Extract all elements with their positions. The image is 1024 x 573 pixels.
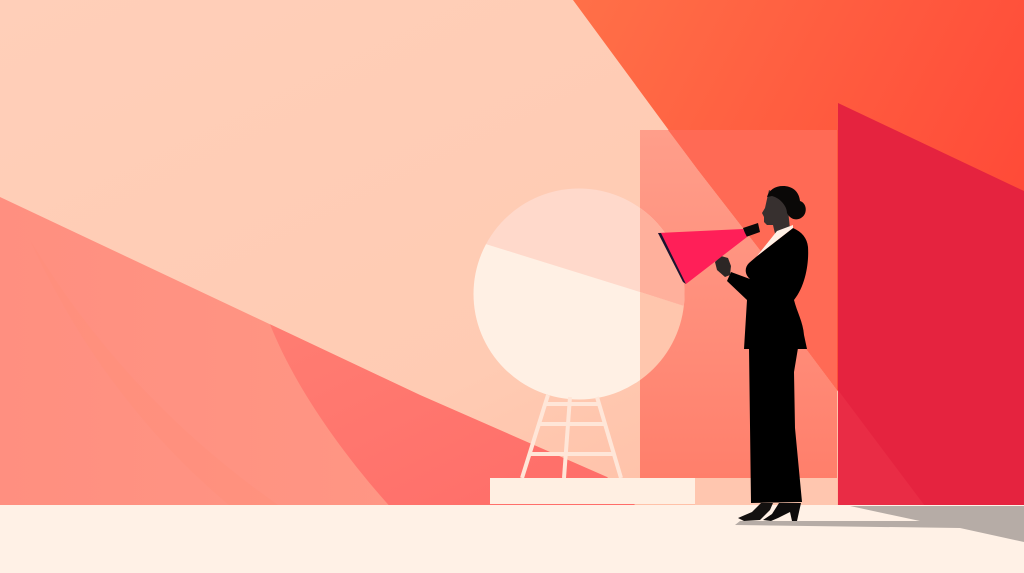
globe: lower part over panel — [640, 292, 684, 380]
panel area over peach wall — [640, 130, 837, 478]
lighter crimson triangle — [838, 390, 925, 506]
megaphone: rim — [658, 233, 686, 284]
megaphone: cone — [658, 229, 747, 284]
hand — [715, 256, 731, 277]
panel: translucent rectangle — [640, 130, 837, 478]
panel: crimson wall — [838, 103, 1024, 506]
shirt collar — [757, 225, 793, 256]
person — [715, 186, 808, 521]
background: salmon lower-left plane — [0, 197, 640, 510]
pedestal — [490, 478, 695, 504]
ladder stand — [522, 395, 621, 478]
globe: upper part over panel — [640, 208, 684, 306]
megaphone — [658, 223, 760, 284]
shoe: right — [763, 503, 801, 521]
globe: lower bright part — [474, 244, 640, 400]
background: orange diagonal plane — [573, 0, 1024, 510]
wall shadow on floor — [735, 506, 1024, 542]
trousers — [749, 348, 802, 503]
neck and face — [762, 190, 790, 238]
globe on stand — [474, 188, 684, 478]
panel area over orange plane — [668, 130, 837, 390]
floor — [0, 505, 1024, 573]
hair and bun — [767, 186, 806, 219]
jacket — [727, 228, 808, 349]
lower panel strip — [695, 478, 837, 506]
wedge: darker coral arc — [270, 324, 640, 510]
globe: upper translucent part — [486, 188, 684, 306]
shoe: left — [738, 503, 773, 521]
megaphone: mouthpiece — [743, 223, 760, 237]
